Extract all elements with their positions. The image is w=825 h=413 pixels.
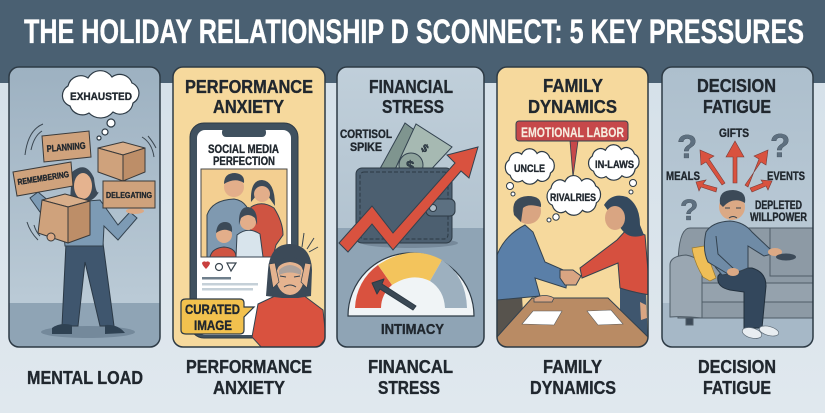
arrow: rising red zigzag — [339, 147, 478, 252]
icon: wallet with cash — [356, 123, 458, 248]
figure: man — [497, 196, 568, 347]
caption: decision fatigue — [698, 357, 776, 398]
label: cortisol spike: SPIKE — [350, 142, 382, 154]
panel heading: PERFORMANCE — [185, 77, 313, 97]
panel heading: ANXIETY — [213, 97, 284, 117]
icon: handshake — [560, 270, 581, 285]
panel: financial stress — [337, 67, 484, 347]
label: events: EVENTS — [767, 169, 805, 183]
icon: wallet with cash: $ — [406, 158, 415, 175]
label: cortisol spike — [340, 129, 392, 154]
like and share icons — [202, 261, 236, 271]
sofa — [670, 228, 813, 325]
panel: performance anxiety — [173, 67, 326, 349]
arrows: radiating choices — [696, 141, 772, 192]
thought cloud: uncle — [505, 149, 554, 196]
caption: financial stress: FINANCAL — [368, 357, 453, 377]
family photo — [201, 169, 287, 257]
label: depleted willpower: DEPLETED — [755, 198, 802, 212]
gauge: intimacy — [348, 253, 474, 316]
icon: yellow pillow — [692, 246, 716, 281]
label: cortisol spike: CORTISOL — [340, 129, 392, 141]
table with papers — [497, 296, 648, 347]
label: depleted willpower — [750, 200, 807, 222]
caption: performance anxiety: ANXIETY — [213, 378, 285, 398]
header band — [0, 0, 825, 83]
caption: family dynamics: DYNAMICS — [530, 378, 616, 398]
panel heading: FAMILY — [543, 76, 603, 96]
box: remembering — [13, 162, 73, 196]
thought cloud: in-laws — [589, 145, 639, 194]
thought cloud: uncle: UNCLE — [514, 163, 545, 175]
icons: question marks: ? — [770, 127, 790, 164]
label: exhausted: EXHAUSTED — [70, 91, 132, 103]
panel heading: STRESS — [382, 97, 444, 117]
label: depleted willpower: WILLPOWER — [750, 210, 807, 224]
caption: performance anxiety — [186, 357, 312, 398]
caption: financial stress — [368, 357, 453, 398]
callout: emotional labor: EMOTIONAL LABOR — [521, 125, 624, 140]
panel heading — [370, 80, 453, 114]
label: meals: MEALS — [666, 169, 700, 183]
caption: financial stress: STRESS — [378, 378, 440, 398]
callout: curated image: CURATED — [185, 301, 240, 317]
caption: performance anxiety: PERFORMANCE — [186, 357, 312, 377]
box: planning: PLANNING — [46, 141, 86, 155]
callout: curated image — [181, 299, 254, 334]
figure: woman — [580, 196, 650, 347]
label: gifts: GIFTS — [719, 126, 749, 140]
box: delegating — [103, 181, 155, 208]
callout: curated image: IMAGE — [194, 317, 232, 333]
thought cloud: in-laws: IN-LAWS — [595, 159, 634, 171]
phone caption: SOCIAL MEDIA — [208, 142, 279, 156]
caption: family dynamics: FAMILY — [543, 357, 602, 377]
box: remembering: REMEMBERING — [17, 169, 70, 187]
panel heading: DYNAMICS — [528, 97, 617, 117]
caption: mental load: MENTAL LOAD — [27, 368, 143, 388]
panel heading: DECISION — [697, 76, 776, 96]
box: delegating: DELEGATING — [106, 190, 152, 200]
panel heading — [528, 78, 616, 114]
icons: question marks — [678, 134, 788, 220]
icons: question marks: ? — [677, 128, 697, 165]
thought bubbles — [62, 71, 139, 140]
panel heading: FATIGUE — [703, 97, 771, 117]
icon: wallet with cash: $ — [419, 142, 430, 156]
icons: question marks: ? — [680, 194, 698, 227]
box: planning — [42, 131, 91, 162]
panel: decision fatigue — [662, 67, 813, 347]
phone caption: PERFECTION — [213, 154, 275, 168]
panel: financial stress: INTIMACY — [381, 321, 444, 338]
figure: anxious woman — [252, 233, 326, 349]
caption: decision fatigue: DECISION — [698, 357, 776, 377]
thought cloud: rivalries — [547, 176, 601, 222]
phone — [190, 123, 298, 338]
caption: family dynamics — [530, 357, 616, 398]
figure: tired man — [704, 190, 796, 340]
panel: mental load — [9, 67, 160, 347]
thought cloud: rivalries: RIVALRIES — [550, 192, 596, 204]
figure: woman juggling boxes — [30, 167, 144, 334]
panel heading: FINANCIAL — [369, 77, 453, 97]
caption: decision fatigue: FATIGUE — [703, 378, 771, 398]
box: top right — [98, 142, 145, 181]
panel heading — [698, 78, 776, 114]
callout: emotional labor — [516, 121, 628, 177]
panel heading — [186, 80, 313, 114]
panel: family dynamics — [497, 67, 650, 347]
box: carried — [38, 194, 90, 243]
phone caption — [208, 144, 279, 166]
